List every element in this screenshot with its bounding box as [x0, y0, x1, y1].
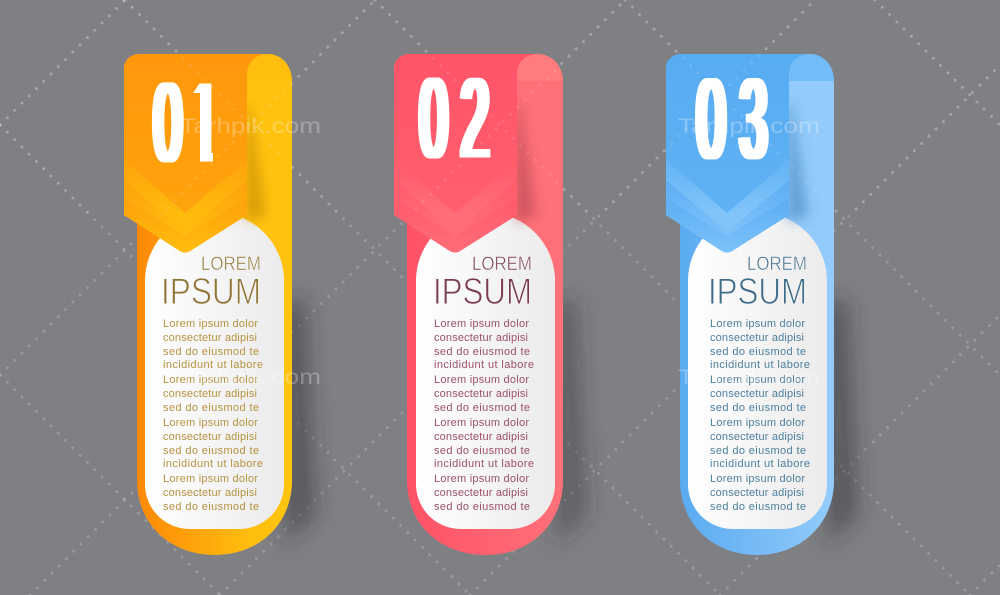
white content panel: [145, 212, 284, 529]
heading: [708, 253, 807, 312]
card body: [407, 200, 563, 555]
heading: IPSUM: [433, 271, 532, 312]
chevron bands: [666, 160, 789, 252]
body text: sed do eiusmod te: [710, 346, 806, 358]
body text: incididunt ut labore: [434, 359, 534, 371]
body text: Lorem ipsum dolor: [710, 318, 805, 330]
number 03: 0: [697, 55, 725, 183]
watermark text: Tarhpik.com: [180, 366, 321, 389]
card 2: red: [394, 54, 587, 555]
ribbon base: [124, 54, 265, 252]
body text: consectetur adipisi: [163, 388, 257, 400]
body text: sed do eiusmod te: [710, 402, 806, 414]
number 01: 1: [190, 61, 218, 186]
body text: consectetur adipisi: [163, 487, 257, 499]
body text: sed do eiusmod te: [710, 445, 806, 457]
column fold shadow: [515, 105, 536, 222]
faint dotted lattice over ribbons: [0, 0, 1000, 215]
body text: consectetur adipisi: [710, 332, 804, 344]
card 1: orange: [124, 54, 316, 555]
body text: Lorem ipsum dolor: [434, 318, 529, 330]
body text: incididunt ut labore: [434, 458, 534, 470]
watermark text: Tarhpik.com: [678, 366, 820, 389]
heading: IPSUM: [161, 271, 261, 312]
watermark text: Tarhpik.com: [678, 115, 820, 138]
watermark text: [180, 115, 820, 389]
card body: [680, 200, 834, 555]
heading: [161, 253, 261, 312]
body text: sed do eiusmod te: [434, 445, 530, 457]
body text: Lorem ipsum dolor: [710, 374, 805, 386]
body text: sed do eiusmod te: [163, 346, 259, 358]
body text: consectetur adipisi: [434, 332, 528, 344]
body text: [434, 318, 534, 513]
white content panel: [688, 212, 827, 529]
heading: LOREM: [201, 253, 261, 275]
heading: IPSUM: [708, 271, 807, 312]
body text: sed do eiusmod te: [163, 402, 259, 414]
body text: sed do eiusmod te: [163, 445, 259, 457]
body text: consectetur adipisi: [163, 332, 257, 344]
white content panel: [416, 212, 555, 529]
body text: consectetur adipisi: [710, 431, 804, 443]
body text: consectetur adipisi: [710, 388, 804, 400]
body text: Lorem ipsum dolor: [710, 417, 805, 429]
card shadow: [824, 300, 858, 545]
ribbon base: [666, 54, 807, 252]
body text: Lorem ipsum dolor: [434, 374, 529, 386]
card shadow: [282, 300, 316, 545]
column cap: [247, 54, 292, 81]
body text: consectetur adipisi: [710, 487, 804, 499]
body text: sed do eiusmod te: [710, 501, 806, 513]
body text: consectetur adipisi: [434, 431, 528, 443]
number 01: [152, 82, 213, 162]
body text: Lorem ipsum dolor: [163, 417, 258, 429]
body text: Lorem ipsum dolor: [434, 417, 529, 429]
body text: consectetur adipisi: [163, 431, 257, 443]
body text: Lorem ipsum dolor: [434, 473, 529, 485]
chevron bands: [124, 160, 247, 252]
ribbon: [666, 54, 807, 252]
heading: LOREM: [747, 253, 807, 275]
body text: [163, 318, 263, 513]
body text: Lorem ipsum dolor: [163, 374, 258, 386]
number 02: 2: [461, 54, 489, 182]
heading: LOREM: [472, 253, 532, 275]
column cap: [517, 54, 563, 81]
card shadow: [553, 300, 587, 545]
card 3: blue: [666, 54, 858, 555]
body text: consectetur adipisi: [434, 487, 528, 499]
number 03: [697, 54, 767, 183]
body text: incididunt ut labore: [710, 458, 810, 470]
card body: [137, 200, 292, 555]
chevron bands: [394, 160, 517, 252]
body text: [710, 318, 810, 513]
body text: Lorem ipsum dolor: [163, 473, 258, 485]
heading: [433, 253, 532, 312]
body text: Lorem ipsum dolor: [710, 473, 805, 485]
body text: Lorem ipsum dolor: [163, 318, 258, 330]
number 02: 0: [420, 55, 447, 182]
ribbon base: [394, 54, 535, 252]
body text: sed do eiusmod te: [434, 402, 530, 414]
body text: sed do eiusmod te: [434, 501, 530, 513]
right column: [789, 54, 834, 515]
body text: consectetur adipisi: [434, 388, 528, 400]
number 02: [420, 54, 489, 182]
right column: [247, 54, 292, 515]
number 01: 0: [154, 61, 182, 186]
ribbon: [124, 54, 265, 252]
body text: incididunt ut labore: [163, 458, 263, 470]
watermark text: Tarhpik.com: [180, 115, 321, 138]
ribbon: [394, 54, 535, 252]
right column: [517, 54, 563, 515]
body text: sed do eiusmod te: [163, 501, 259, 513]
body text: incididunt ut labore: [710, 359, 810, 371]
number 03: 3: [740, 54, 767, 183]
column cap: [789, 54, 834, 81]
body text: sed do eiusmod te: [434, 346, 530, 358]
column fold shadow: [245, 105, 266, 222]
column fold shadow: [787, 105, 808, 222]
body text: incididunt ut labore: [163, 359, 263, 371]
